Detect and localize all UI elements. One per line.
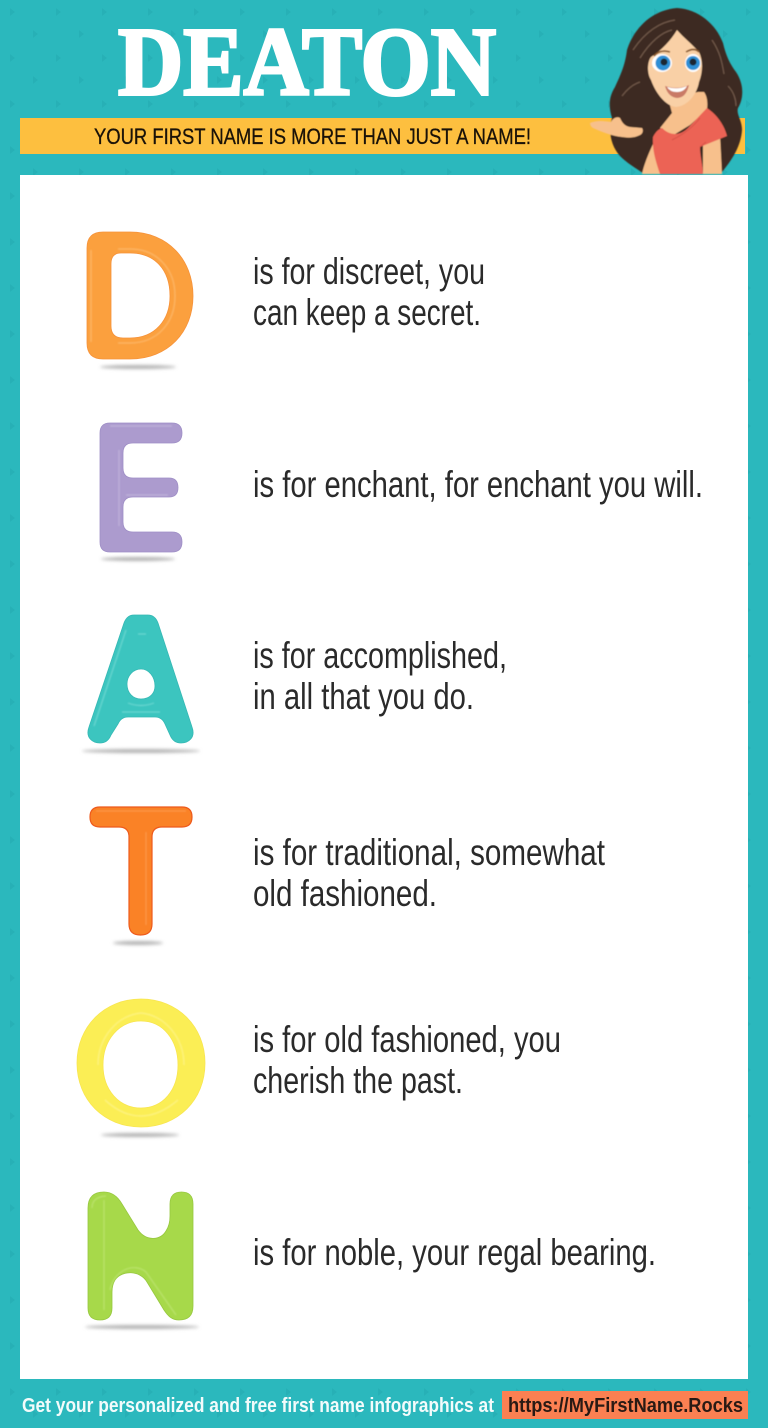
text: D: can keep a secret. (253, 292, 481, 333)
row: E (100, 423, 703, 561)
letter E (100, 423, 182, 561)
row: O (77, 999, 561, 1137)
shirt (653, 108, 727, 174)
letter D (87, 232, 193, 369)
eyebrows (654, 50, 699, 56)
arm right (703, 134, 722, 174)
text: A: in all that you do. (253, 676, 474, 717)
text: T: old fashioned. (253, 873, 437, 914)
neck (660, 92, 707, 136)
mouth (665, 85, 689, 98)
footer link badge: https://MyFirstName.Rocks (508, 1395, 743, 1417)
text: T (253, 832, 606, 914)
row: A (82, 615, 507, 753)
text: N: is for noble, your regal bearing. (253, 1232, 656, 1273)
face (648, 30, 702, 107)
text: O: is for old fashioned, you (253, 1019, 561, 1060)
illustration: woman (590, 8, 742, 174)
banner: YOUR FIRST NAME IS MORE THAN JUST A NAME! (94, 124, 531, 149)
arm left (642, 142, 662, 174)
eyes (652, 54, 701, 72)
text: T: is for traditional, somewhat (253, 832, 606, 873)
letter O (77, 999, 205, 1137)
footer text: Get your personalized and free first name infographics at (22, 1395, 494, 1417)
text: D (253, 251, 485, 333)
hand (590, 117, 643, 138)
hair (610, 8, 742, 174)
title: DEATON (118, 8, 496, 116)
row: N (85, 1192, 656, 1329)
row: D (87, 232, 485, 369)
text: O (253, 1019, 561, 1101)
letter N (85, 1192, 199, 1329)
panel: white content (20, 175, 748, 1379)
row: T (90, 807, 606, 945)
text: A (253, 635, 507, 717)
letter T (90, 807, 192, 945)
text: A: is for accomplished, (253, 635, 507, 676)
letter A (82, 615, 200, 753)
text: O: cherish the past. (253, 1060, 463, 1101)
text: D: is for discreet, you (253, 251, 485, 292)
banner (20, 118, 745, 154)
